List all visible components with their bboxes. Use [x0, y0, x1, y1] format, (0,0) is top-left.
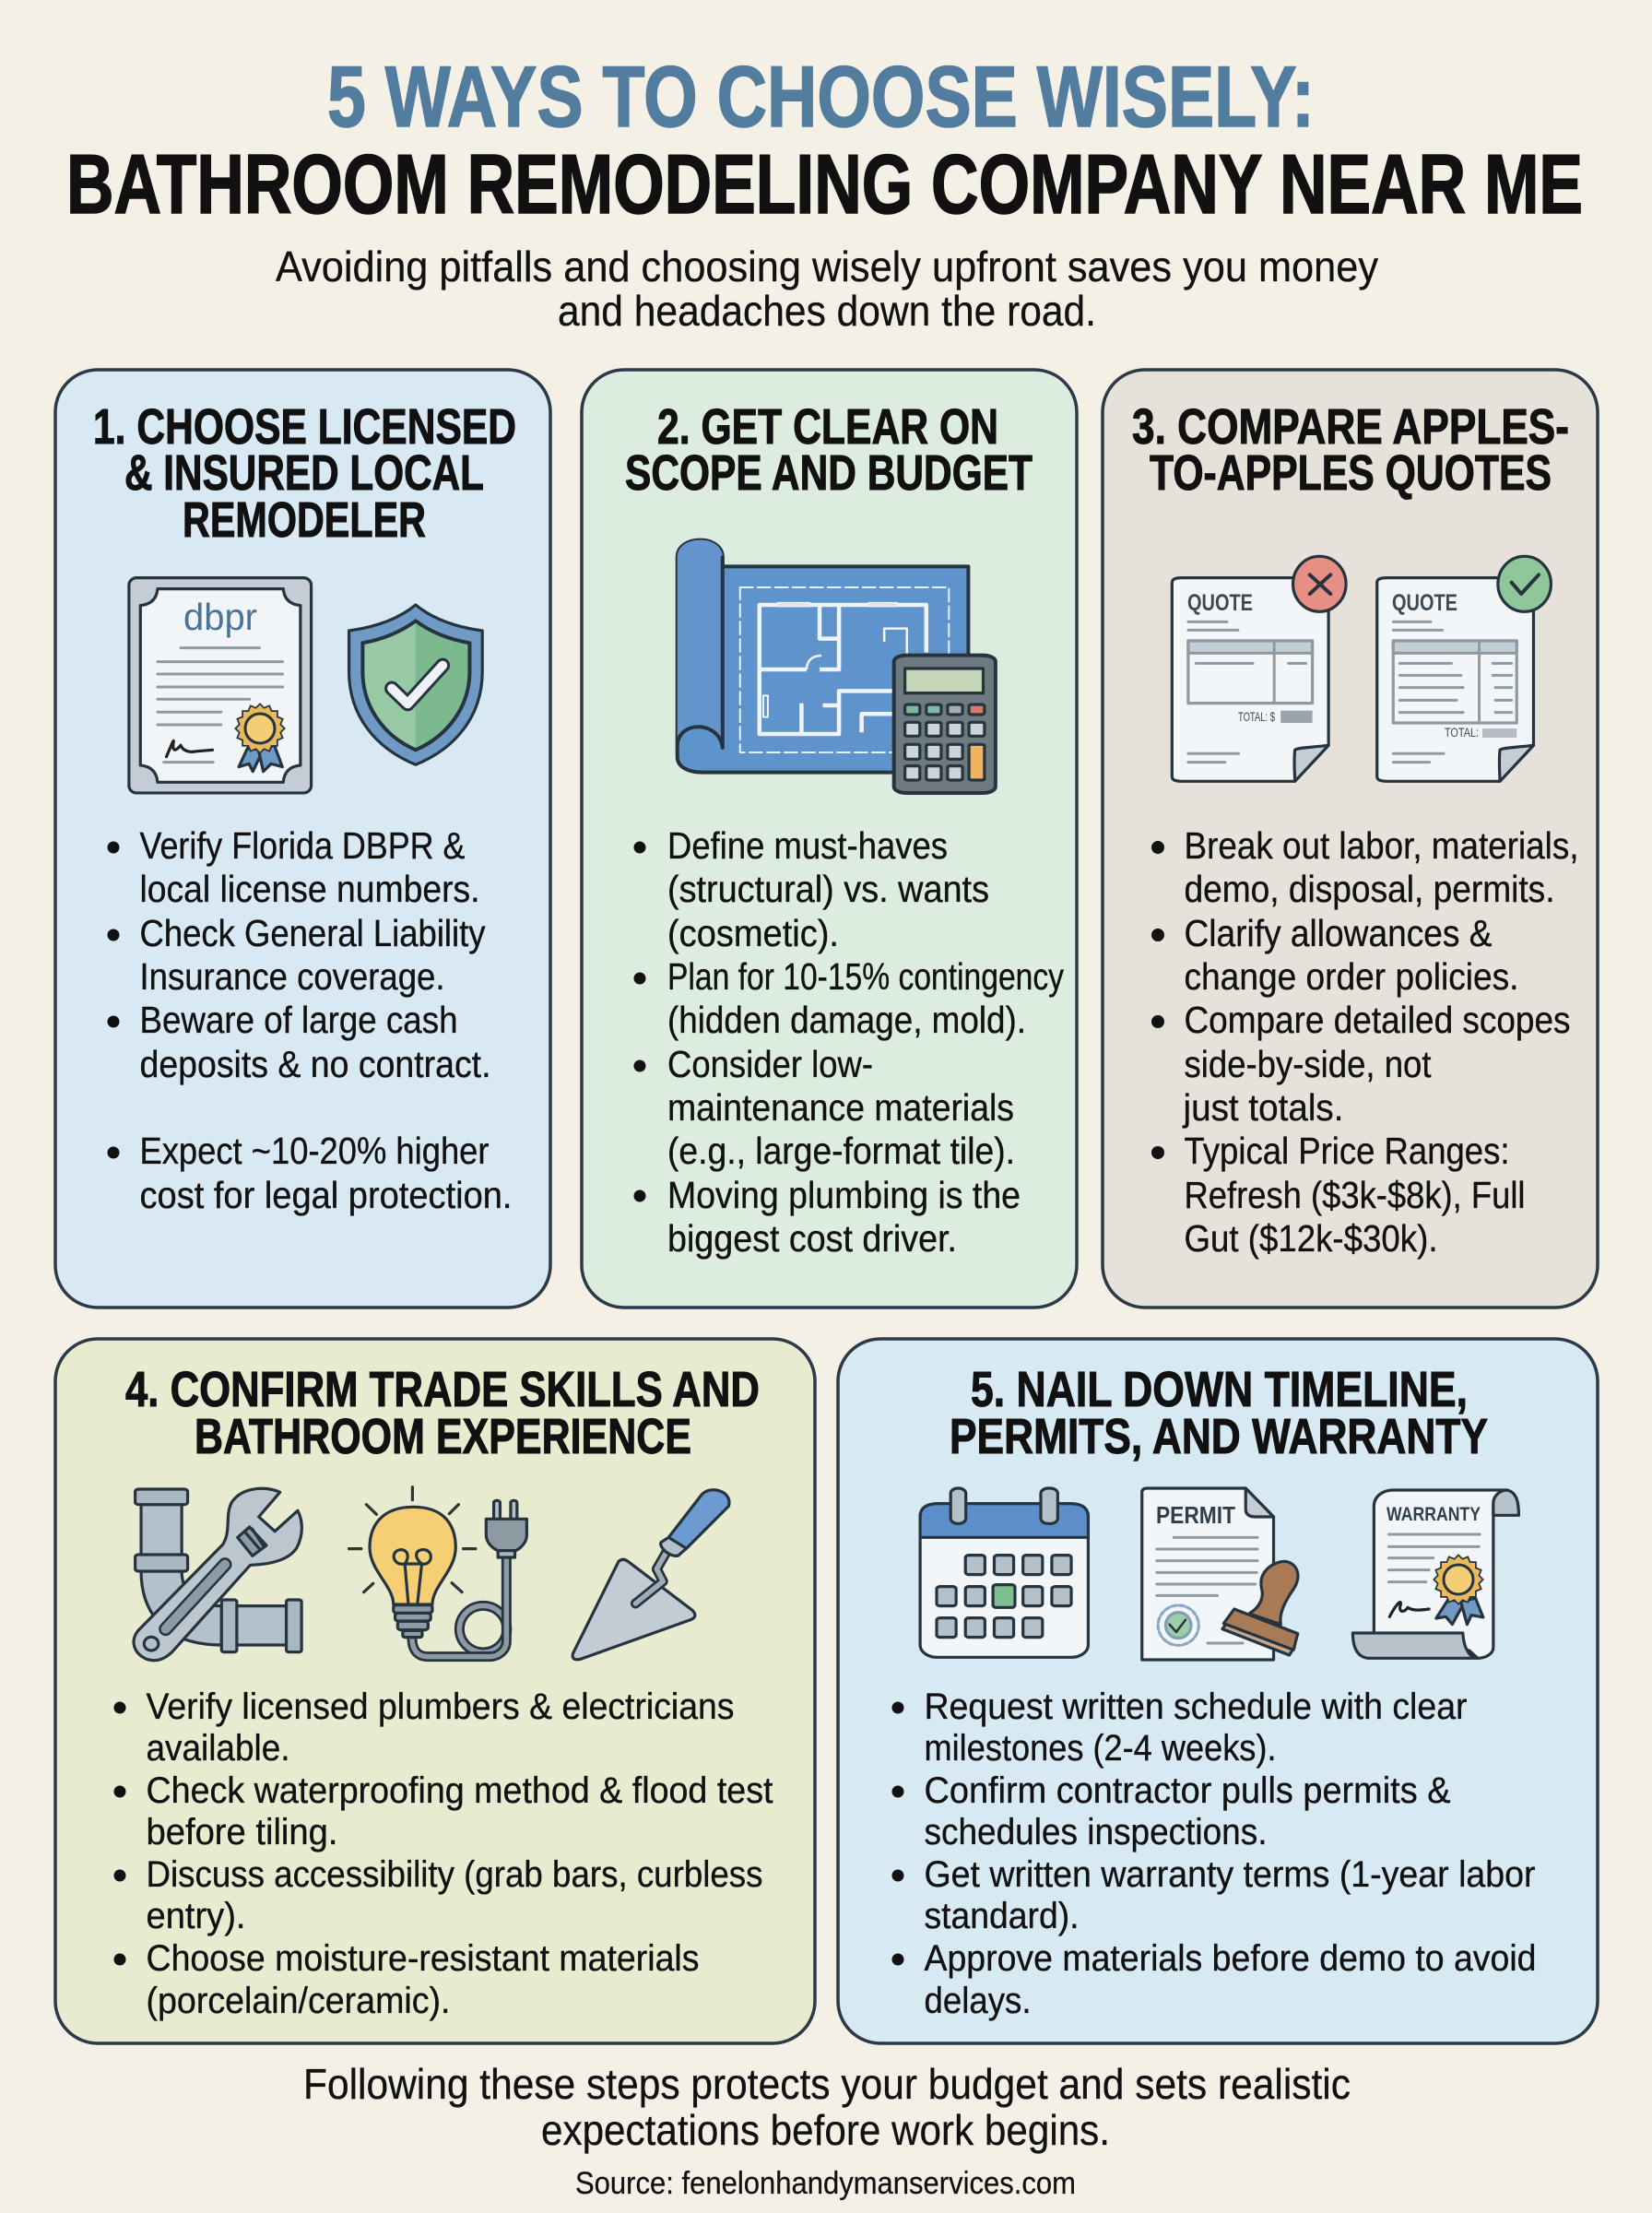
icon: calendar: [920, 1488, 1088, 1657]
icon: dbpr certificate: [129, 578, 312, 793]
panel 1 bullet list: local license numbers.: [140, 868, 479, 910]
panel 1 bullet list: Insurance coverage.: [140, 955, 444, 998]
subtitle: [276, 243, 1378, 335]
panel 4 bullet list: Choose moisture-resistant materials: [146, 1938, 699, 1979]
panel 3 bullet list: just totals.: [1183, 1086, 1344, 1129]
icon: dbpr certificate: dbpr: [183, 596, 257, 638]
panel 4 heading: BATHROOM EXPERIENCE: [195, 1409, 691, 1464]
icon: pipe and wrench: [134, 1488, 301, 1661]
panel 4 heading: 4. CONFIRM TRADE SKILLS AND: [125, 1362, 760, 1417]
panel 2 bullet list: Plan for 10-15% contingency: [667, 955, 1064, 998]
panel 3 bullet list: change order policies.: [1184, 955, 1519, 998]
icon: rejected quote: QUOTE: [1187, 590, 1253, 616]
panel 3 bullet list: demo, disposal, permits.: [1184, 868, 1554, 910]
panel 5 bullet list: Confirm contractor pulls permits &: [924, 1770, 1451, 1811]
panel 3 bullet list: Refresh ($3k-$8k), Full: [1184, 1174, 1525, 1216]
panel 2 bullet list: (e.g., large-format tile).: [667, 1130, 1015, 1172]
panel 2 bullet list: Consider low-: [667, 1043, 873, 1085]
panel 5 bullet list: Get written warranty terms (1-year labor: [924, 1854, 1536, 1895]
icon: rejected quote: TOTAL: $: [1238, 709, 1275, 724]
panel 4 bullet list: Verify licensed plumbers & electricians: [146, 1686, 734, 1727]
panel 5 bullet list: schedules inspections.: [924, 1812, 1267, 1852]
panel 3 heading: [1132, 399, 1569, 501]
panel 2 bullet list: maintenance materials: [667, 1086, 1014, 1129]
icon: trowel: [572, 1490, 729, 1660]
panel 1 bullet list: Beware of large cash: [140, 999, 457, 1041]
title: [66, 48, 1583, 231]
panel 5 bullet list: [892, 1686, 1536, 2021]
panel 5: timeline permits warranty: [838, 1339, 1598, 2043]
panel 3 bullet list: Break out labor, materials,: [1184, 824, 1578, 867]
closing statement: [303, 2060, 1351, 2154]
icon: warranty scroll: WARRANTY: [1386, 1504, 1481, 1525]
source line: Source: fenelonhandymanservices.com: [575, 2166, 1076, 2201]
panel 2: scope and budget: [582, 370, 1077, 1308]
panel 2 heading: [625, 399, 1032, 501]
panel 3 heading: 3. COMPARE APPLES-: [1132, 399, 1569, 455]
panel 2 bullet list: Define must-haves: [667, 824, 948, 867]
panel 1 bullet list: cost for legal protection.: [140, 1174, 513, 1216]
panel 2 bullet list: (cosmetic).: [667, 912, 839, 954]
panel 4 bullet list: [114, 1686, 773, 2021]
panel 5 bullet list: delays.: [924, 1981, 1031, 2021]
panel 5 heading: [950, 1362, 1488, 1464]
icon: approved quote: QUOTE: [1392, 590, 1457, 616]
panel 1 bullet list: deposits & no contract.: [140, 1043, 490, 1085]
panel 2 bullet list: biggest cost driver.: [667, 1217, 957, 1260]
title: 5 WAYS TO CHOOSE WISELY:: [327, 48, 1315, 145]
panel 5 heading: 5. NAIL DOWN TIMELINE,: [971, 1362, 1468, 1417]
panel 4 heading: [125, 1362, 760, 1464]
panel 3 bullet list: [1151, 824, 1578, 1260]
icon: light bulb and plug: [349, 1487, 526, 1657]
panel 4 bullet list: Discuss accessibility (grab bars, curbless: [146, 1854, 763, 1895]
panel 4 bullet list: available.: [146, 1728, 289, 1769]
panel 3: compare quotes: [1103, 370, 1598, 1308]
panel 1 bullet list: Expect ~10-20% higher: [140, 1130, 489, 1172]
panel 2 bullet list: Moving plumbing is the: [667, 1174, 1021, 1216]
closing statement: expectations before work begins.: [541, 2106, 1110, 2154]
panel 1 bullet list: Verify Florida DBPR &: [140, 824, 465, 867]
icon: approved quote: TOTAL:: [1445, 725, 1479, 740]
panel 3 bullet list: side-by-side, not: [1184, 1043, 1432, 1085]
icon: rejected quote: [1172, 556, 1346, 781]
panel 5 bullet list: standard).: [924, 1896, 1079, 1936]
panel 1: licensed and insured: [55, 370, 550, 1308]
panel 1 heading: REMODELER: [183, 492, 426, 548]
panel 4: trade skills: [55, 1339, 815, 2043]
panel 4 bullet list: (porcelain/ceramic).: [146, 1981, 450, 2021]
panel 5 bullet list: milestones (2-4 weeks).: [924, 1728, 1276, 1769]
panel 2 bullet list: (structural) vs. wants: [667, 868, 989, 910]
icon: calculator: [894, 656, 996, 793]
icon: permit with stamp: [1142, 1488, 1298, 1660]
panel 1 heading: [93, 399, 516, 548]
panel 3 heading: TO-APPLES QUOTES: [1150, 445, 1552, 501]
panel 2 heading: 2. GET CLEAR ON: [657, 399, 998, 455]
icon: approved quote: [1377, 556, 1551, 781]
icon: shield with check: [349, 605, 482, 764]
panel 5 heading: PERMITS, AND WARRANTY: [950, 1409, 1488, 1464]
panel 1 bullet list: Check General Liability: [140, 912, 486, 954]
panel 3 bullet list: Typical Price Ranges:: [1184, 1130, 1510, 1172]
panel 2 bullet list: (hidden damage, mold).: [667, 999, 1026, 1041]
panel 2 bullet list: [634, 824, 1064, 1260]
panel 5 bullet list: Request written schedule with clear: [924, 1686, 1468, 1727]
panel 1 heading: 1. CHOOSE LICENSED: [93, 399, 516, 455]
panel 3 bullet list: Gut ($12k-$30k).: [1184, 1217, 1438, 1260]
icon: blueprint: [678, 540, 968, 773]
panel 3 bullet list: Clarify allowances &: [1184, 912, 1492, 954]
subtitle: Avoiding pitfalls and choosing wisely upfront saves you money: [276, 243, 1378, 290]
panel 5 bullet list: Approve materials before demo to avoid: [924, 1938, 1536, 1979]
panel 2 heading: SCOPE AND BUDGET: [625, 445, 1032, 501]
panel 3 bullet list: Compare detailed scopes: [1184, 999, 1571, 1041]
panel 1 heading: & INSURED LOCAL: [124, 445, 484, 501]
icon: warranty scroll: [1352, 1490, 1518, 1658]
panel 4 bullet list: entry).: [146, 1896, 245, 1936]
closing statement: Following these steps protects your budget and sets realistic: [303, 2060, 1351, 2108]
subtitle: and headaches down the road.: [558, 287, 1096, 335]
panel 4 bullet list: before tiling.: [146, 1812, 337, 1852]
icon: permit with stamp: PERMIT: [1156, 1501, 1235, 1529]
panel 1 bullet list: [107, 824, 513, 1216]
panel 4 bullet list: Check waterproofing method & flood test: [146, 1770, 773, 1811]
